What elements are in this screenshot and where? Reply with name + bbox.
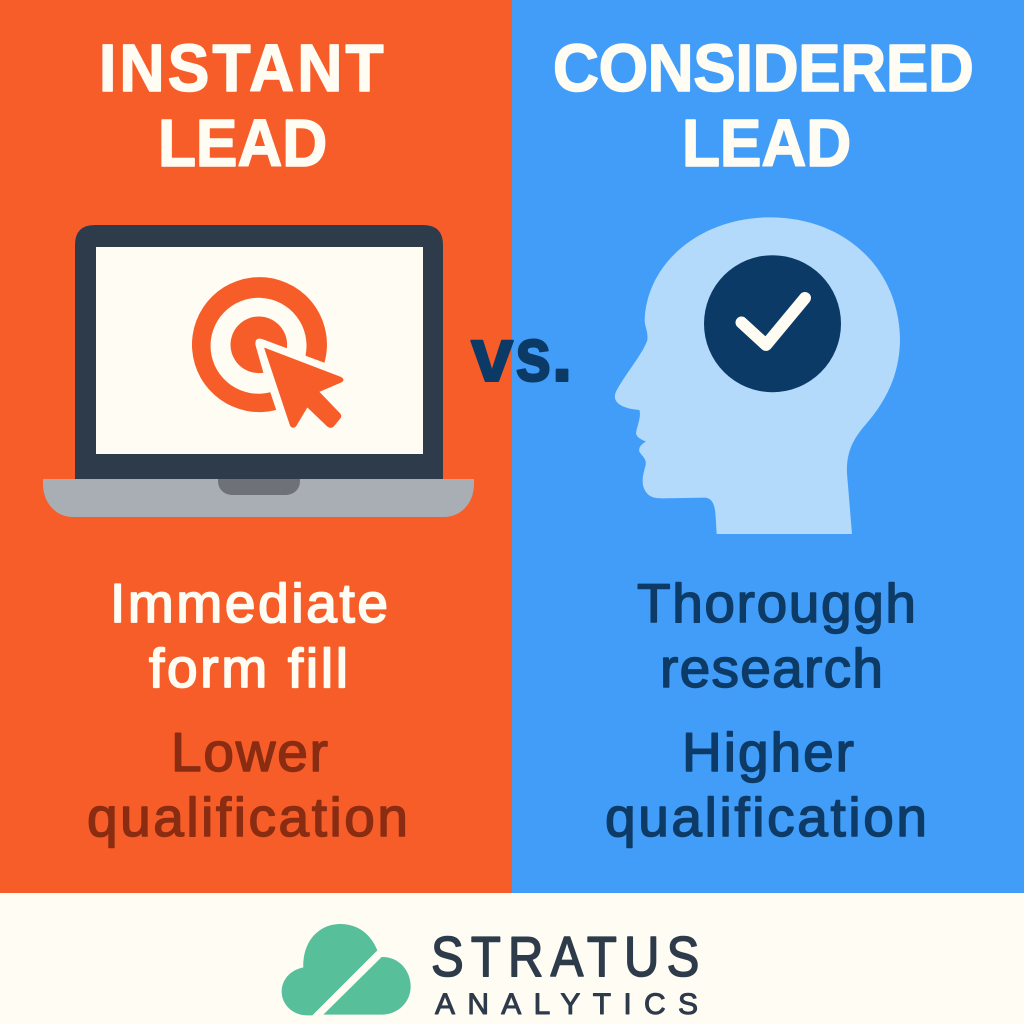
vs. label: v xyxy=(471,313,513,398)
panel: considered lead background xyxy=(512,0,1024,893)
logo: wordmark xyxy=(431,926,699,1021)
text block: immediate form fill xyxy=(110,572,388,699)
panel: instant lead background xyxy=(0,0,512,893)
check badge xyxy=(704,255,841,392)
vs. label: s xyxy=(515,313,551,398)
heading: instant lead xyxy=(99,30,384,180)
logo: wordmark: STRATUS xyxy=(431,926,699,989)
head silhouette xyxy=(615,217,900,534)
text block: immediate form fill: Immediate xyxy=(110,572,388,634)
vs. label: . xyxy=(552,313,573,398)
text block: thorough research: research xyxy=(660,637,883,699)
text block: lower qualification: qualification xyxy=(87,786,408,848)
icon: target xyxy=(192,277,327,412)
check mark xyxy=(742,298,805,345)
text block: thorough research xyxy=(637,572,916,699)
heading: considered lead: LEAD xyxy=(682,105,851,180)
text block: higher qualification: Higher xyxy=(682,721,854,783)
icon: head with check mark xyxy=(615,217,900,534)
text block: higher qualification xyxy=(605,721,927,848)
text block: lower qualification: Lower xyxy=(171,721,328,783)
vs. label xyxy=(471,313,573,398)
icon: cursor arrow xyxy=(265,348,343,427)
logo: wordmark: ANALYTICS xyxy=(435,988,698,1021)
laptop screen xyxy=(96,247,423,454)
laptop base xyxy=(43,479,474,517)
text block: immediate form fill: form fill xyxy=(149,637,348,699)
heading: considered lead: CONSIDERED xyxy=(553,31,974,105)
text block: higher qualification: qualification xyxy=(605,786,927,848)
heading: instant lead: LEAD xyxy=(158,105,327,180)
laptop lid xyxy=(75,225,443,480)
icon: laptop with target and cursor xyxy=(43,225,474,517)
text block: thorough research: Thorouggh xyxy=(637,572,916,634)
laptop notch xyxy=(218,479,300,495)
heading: instant lead: INSTANT xyxy=(99,30,384,105)
logo: cloud xyxy=(282,924,411,1015)
text block: lower qualification xyxy=(87,721,408,848)
heading: considered lead xyxy=(553,31,974,180)
footer band xyxy=(0,893,1024,1024)
